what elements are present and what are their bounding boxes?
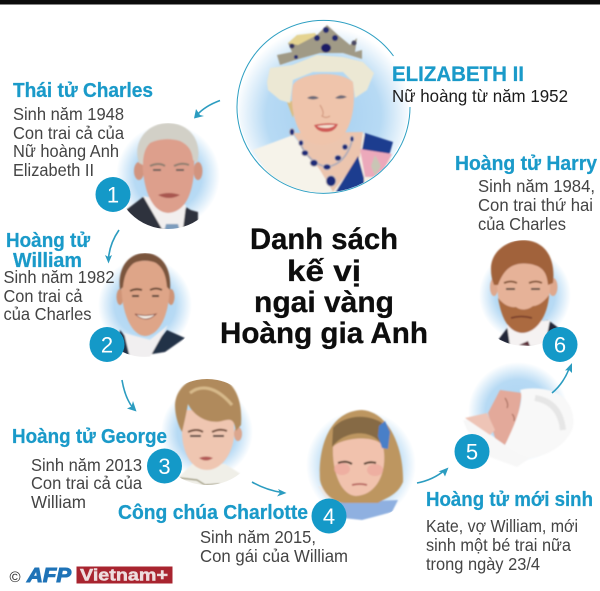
title: Hoàng gia Anh (220, 317, 428, 350)
label: Charlotte: Sinh năm 2015, (200, 527, 316, 547)
label: Charlotte (118, 502, 348, 566)
portrait: George (161, 375, 253, 486)
arrow: newborn to Harry (552, 363, 572, 393)
label: Charlotte: Công chúa Charlotte (118, 502, 308, 524)
logo: copyright AFP Vietnam+: Vietnam+ (80, 566, 168, 584)
label: George: Hoàng tử George (12, 426, 167, 448)
label: William: William (13, 250, 82, 272)
portrait: Charles (116, 123, 220, 232)
label: Charles: Nữ hoàng Anh (13, 141, 119, 161)
label: newborn: trong ngày 23/4 (426, 554, 540, 574)
portrait: Elizabeth II (237, 20, 410, 198)
arrow: George to Charlotte (252, 482, 286, 496)
label: newborn: sinh một bé trai nữa (426, 535, 571, 555)
label: Charles: Sinh năm 1948 (13, 104, 124, 124)
badge 5 (454, 434, 490, 469)
label: newborn: Kate, vợ William, mới (426, 516, 578, 536)
label: George (12, 426, 167, 512)
label: Charles (13, 80, 153, 180)
badge 6 (542, 327, 578, 362)
badge 3 (147, 448, 182, 484)
label: William: Hoàng tử (6, 230, 90, 252)
title: kế vị (287, 255, 361, 288)
title: ngai vàng (254, 286, 394, 319)
label: William: Con trai cả (4, 286, 83, 306)
badge 1: 1 (107, 182, 119, 208)
label: William: Sinh năm 1982 (4, 267, 114, 287)
label: newborn (426, 489, 593, 574)
portrait: Harry (479, 240, 571, 348)
label: George: William (31, 492, 86, 512)
label: Charles: Con trai cả của (13, 123, 124, 143)
label: William: của Charles (4, 304, 92, 324)
title (220, 223, 428, 350)
label: George: Con trai cả của (31, 473, 142, 493)
title: Danh sách (250, 223, 398, 256)
label: Charles: Thái tử Charles (13, 80, 153, 102)
arrow: Elizabeth to Charles (194, 100, 220, 118)
label: Harry: Hoàng tử Harry (455, 153, 598, 175)
label: Elizabeth II: ELIZABETH II (392, 63, 524, 86)
arrow: Charlotte to newborn (417, 468, 448, 483)
badge 5: 5 (466, 440, 478, 464)
label: Charles: Elizabeth II (13, 160, 94, 180)
badge 6: 6 (554, 332, 566, 358)
label: Elizabeth II: Nữ hoàng từ năm 1952 (392, 86, 568, 106)
arrow: Charles to William (105, 230, 119, 264)
logo: copyright AFP Vietnam+ (10, 565, 172, 587)
label: Harry: Con trai thứ hai (478, 195, 593, 215)
badge 4 (312, 498, 346, 534)
label: Harry: của Charles (478, 214, 566, 234)
badge 2: 2 (101, 332, 113, 358)
badge 1 (96, 177, 130, 212)
label: William (4, 230, 114, 324)
badge 2 (90, 327, 124, 362)
label: Elizabeth II (392, 63, 568, 106)
top black bar (0, 0, 600, 4)
portrait: William (98, 253, 192, 360)
badge 4: 4 (323, 504, 335, 529)
logo: copyright AFP Vietnam+: AFP (26, 565, 72, 587)
label: George: Sinh năm 2013 (31, 455, 142, 475)
arrow: William to George (122, 380, 136, 412)
logo: copyright AFP Vietnam+: © (10, 569, 21, 586)
label: Harry: Sinh năm 1984, (478, 176, 595, 196)
portrait: Charlotte (306, 410, 416, 520)
label: Harry (455, 153, 598, 234)
portrait: newborn (463, 362, 574, 467)
label: Charlotte: Con gái của William (200, 546, 348, 566)
label: newborn: Hoàng tử mới sinh (426, 489, 593, 511)
badge 3: 3 (158, 454, 171, 479)
